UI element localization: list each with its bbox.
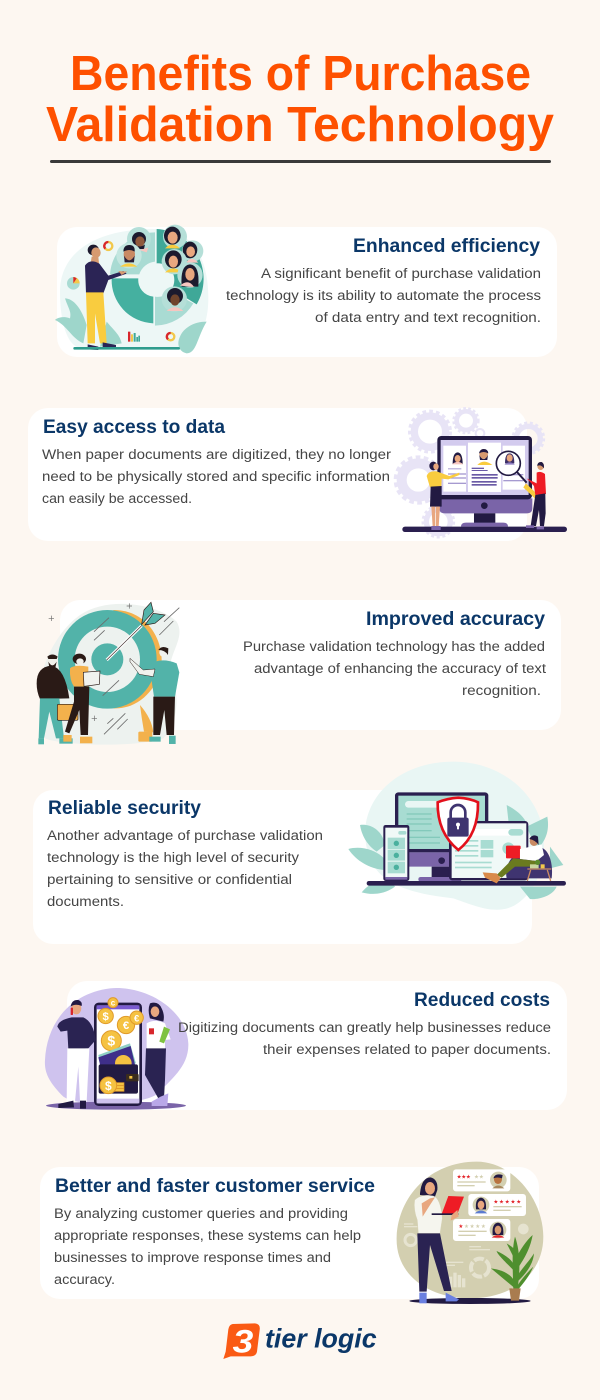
heading: Enhanced efficiency xyxy=(353,236,540,257)
body text: documents. xyxy=(47,894,124,910)
body text: technology is its ability to automate the process xyxy=(226,288,541,304)
body text: advantage of enhancing the accuracy of text xyxy=(254,661,546,677)
body text xyxy=(47,828,323,910)
body text: Purchase validation technology has the added xyxy=(243,639,545,655)
body text: Another advantage of purchase validation xyxy=(47,828,323,844)
body text: pertaining to sensitive or confidential xyxy=(47,872,292,888)
body text: appropriate responses, these systems can help xyxy=(54,1228,361,1244)
body text: By analyzing customer queries and providing xyxy=(54,1206,348,1222)
heading: Improved accuracy xyxy=(366,609,545,630)
illustration: woman with reviews and plant: ★★ xyxy=(474,1173,484,1180)
panel: improved accuracy xyxy=(37,600,561,745)
body text: of data entry and text recognition. xyxy=(315,310,541,326)
body text: businesses to improve response times and xyxy=(54,1250,331,1266)
illustration: phone with wallet and coins: € xyxy=(123,1020,130,1032)
illustration: phone with wallet and coins: c xyxy=(111,999,116,1008)
logo: 3 tier logic: 3 xyxy=(233,1323,254,1359)
illustration: team pie chart xyxy=(55,225,208,353)
logo: 3 tier logic xyxy=(223,1323,377,1359)
title xyxy=(46,47,554,152)
heading: Reduced costs xyxy=(414,990,550,1011)
title: Benefits of Purchase xyxy=(70,47,531,101)
panel: easy access to data xyxy=(28,408,567,541)
body text xyxy=(42,447,391,507)
illustration: target and arrow xyxy=(37,602,179,745)
illustration: woman with reviews and plant: ★★★★★ xyxy=(493,1198,521,1205)
illustration: profiles on monitor xyxy=(396,408,567,537)
body text xyxy=(243,639,546,699)
body text: their expenses related to paper documents. xyxy=(263,1042,551,1058)
heading: Easy access to data xyxy=(43,417,225,438)
body text xyxy=(226,266,541,326)
illustration: woman with reviews and plant: ★★★★ xyxy=(464,1223,486,1230)
illustration: phone with wallet and coins: € xyxy=(134,1013,140,1023)
body text xyxy=(178,1020,551,1058)
panel: reliable security xyxy=(33,762,566,944)
illustration: phone with wallet and coins xyxy=(45,988,188,1110)
illustration: woman with reviews and plant: ★ xyxy=(458,1223,463,1230)
heading: Reliable security xyxy=(48,798,201,819)
illustration: devices and security shield xyxy=(348,762,566,910)
body text: A significant benefit of purchase validation xyxy=(261,266,541,282)
heading: Better and faster customer service xyxy=(55,1176,375,1197)
body text: can easily be accessed. xyxy=(42,491,192,507)
title: Validation Technology xyxy=(46,98,554,152)
illustration: woman with reviews and plant: ★★★ xyxy=(457,1173,471,1180)
body text: accuracy. xyxy=(54,1272,115,1288)
body text xyxy=(54,1206,361,1288)
panel: reduced costs xyxy=(45,981,567,1110)
panel: enhanced efficiency xyxy=(55,225,557,357)
illustration: phone with wallet and coins: $ xyxy=(107,1033,115,1049)
illustration: woman with reviews and plant xyxy=(397,1162,543,1304)
body text: When paper documents are digitized, they no longer xyxy=(42,447,391,463)
panel: better and faster customer service xyxy=(40,1162,543,1304)
logo: 3 tier logic: tier logic xyxy=(265,1323,377,1353)
illustration: phone with wallet and coins: $ xyxy=(105,1079,112,1093)
body text: Digitizing documents can greatly help businesses reduce xyxy=(178,1020,551,1036)
body text: technology is the high level of security xyxy=(47,850,300,866)
body text: recognition. xyxy=(462,683,541,699)
body text: need to be physically stored and specific information xyxy=(42,469,390,485)
illustration: phone with wallet and coins: $ xyxy=(103,1011,110,1023)
